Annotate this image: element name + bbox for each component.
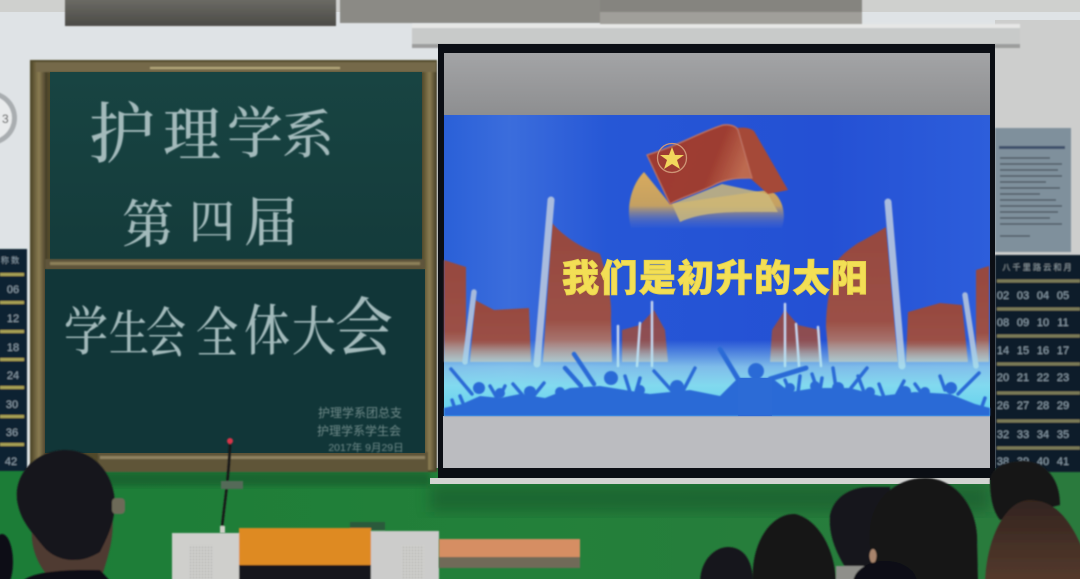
right seat-number board: 26 [997,400,1009,412]
poster on right wall [995,128,1071,252]
right seat-number board: 05 [1057,290,1069,302]
audience group right [700,461,1080,579]
right seat-number board: 40 [1037,456,1049,468]
crowd glow [444,340,990,416]
lower board panel [45,269,425,453]
clock: 3 [2,112,9,126]
left seat-number board: 30 [6,399,18,411]
left seat-number board: 42 [5,456,17,468]
chalk title line 3: 会 [146,305,186,365]
slide title: 我们是初升的太阳 [562,258,868,299]
emblem rays [672,184,778,222]
right seat-number board: 16 [1037,345,1049,357]
chalk title line 1 [89,99,334,172]
green lower wall [0,468,1080,579]
chalk title line 3: 会 [335,295,393,365]
audience head far left [0,534,13,579]
lectern back item [350,522,385,530]
head with ponytail [753,514,836,579]
slide [444,115,990,416]
upper board panel [50,72,422,260]
collar [836,566,868,579]
chalk title line 1: 系 [282,108,334,165]
chalk title line 2: 届 [244,193,298,253]
ceiling fixtures [65,0,862,31]
chalk title line 2: 第 [122,198,174,255]
screen roller bar [430,478,990,484]
speaker dots left [190,545,212,579]
lectern left panel [172,533,239,579]
right seat-number board: 23 [1057,372,1069,384]
left seat-number board: 06 [7,284,19,296]
chalk signature: 护理学系学生会 [317,423,401,438]
emblem flag [647,125,752,204]
right seat-number board: 03 [1017,290,1029,302]
head behind [990,461,1060,520]
emblem wheat wreath [629,172,784,228]
right seat-number board: 39 [1017,456,1029,468]
league emblem [629,125,788,228]
board frame [30,60,437,472]
head front centre [853,561,917,579]
right seat-number board: 21 [1017,372,1029,384]
chalk title line 3: 生 [109,308,149,361]
right seat-number board: 38 [997,456,1009,468]
ear [870,549,876,563]
screen black border [438,44,995,480]
right seat-number board: 09 [1017,317,1029,329]
blackboard [30,60,437,472]
chalk title line 3: 体 [244,301,290,362]
head small [700,547,753,579]
left seat-number board: 18 [7,342,19,354]
projector screen [430,44,995,484]
left seat-number board: 称 数 [1,255,19,265]
right seat-number board: 20 [997,372,1009,384]
screen upper blank area [444,53,990,116]
chalk title line 2: 四 [189,197,235,248]
microphone [220,438,243,533]
audience member left with glasses [17,450,125,579]
right seat-number board: 34 [1037,429,1049,441]
chalk title line 1: 护 [89,99,155,172]
right seat-number board: 11 [1057,317,1069,329]
emblem circle [658,144,686,172]
side table [439,539,580,568]
right seat-number board: 10 [1037,317,1049,329]
right seat-number board: 15 [1017,345,1029,357]
lectern orange panel [239,528,371,565]
flag poles [465,200,976,366]
left main flag [543,223,612,362]
chalk title line 1: 理 [163,103,221,168]
right seat-number board: 八 千 里 路 云 和 月 [1002,262,1072,272]
brown hair head [985,500,1080,579]
emblem star [660,147,684,169]
projector screen casing [412,24,1020,48]
right seat-number board: 02 [997,290,1009,302]
left seat-number board [0,249,27,471]
right seat-number board [995,255,1080,472]
right main flag [826,227,898,362]
left seat-number board: 12 [7,313,19,325]
chalk signature: 2017年 9月29日 [328,441,404,454]
right seat-number board: 27 [1017,400,1029,412]
right seat-number board: 08 [997,317,1009,329]
clock [0,91,17,145]
chalk title line 3: 大 [292,303,336,362]
right seat-number board: 14 [997,345,1009,357]
right seat-number board: 28 [1037,400,1049,412]
right seat-number board: 04 [1037,290,1049,302]
flags back row [444,223,989,362]
chalk signature [317,405,404,454]
emblem flag fold [737,128,788,194]
lectern dark base [239,565,371,579]
chalk title line 2 [122,193,298,255]
left seat-number board: 24 [7,370,19,382]
right seat-number board: 33 [1017,429,1029,441]
right seat-number board: 22 [1037,372,1049,384]
lectern right panel [370,531,439,579]
lectern [172,522,439,579]
right seat-number board: 35 [1057,429,1069,441]
right seat-number board: 17 [1057,345,1069,357]
right seat-number board: 41 [1057,456,1069,468]
speaker dots right [402,545,424,579]
torso of main figure [738,378,772,416]
chalk title line 1: 学 [227,104,283,166]
chalk title line 3: 全 [196,304,238,364]
slide background [444,115,990,416]
crowd silhouette [444,349,990,416]
chalk signature: 护理学系团总支 [318,405,402,420]
right seat-number board: 29 [1057,400,1069,412]
chalk title line 3: 学 [64,303,108,362]
head large [870,478,978,579]
head middle [830,487,890,579]
right seat-number board: 32 [997,429,1009,441]
left seat-number board: 36 [6,427,18,439]
chalk title line 3 [64,295,393,365]
board divider [45,259,425,269]
screen lower blank area [443,416,990,468]
